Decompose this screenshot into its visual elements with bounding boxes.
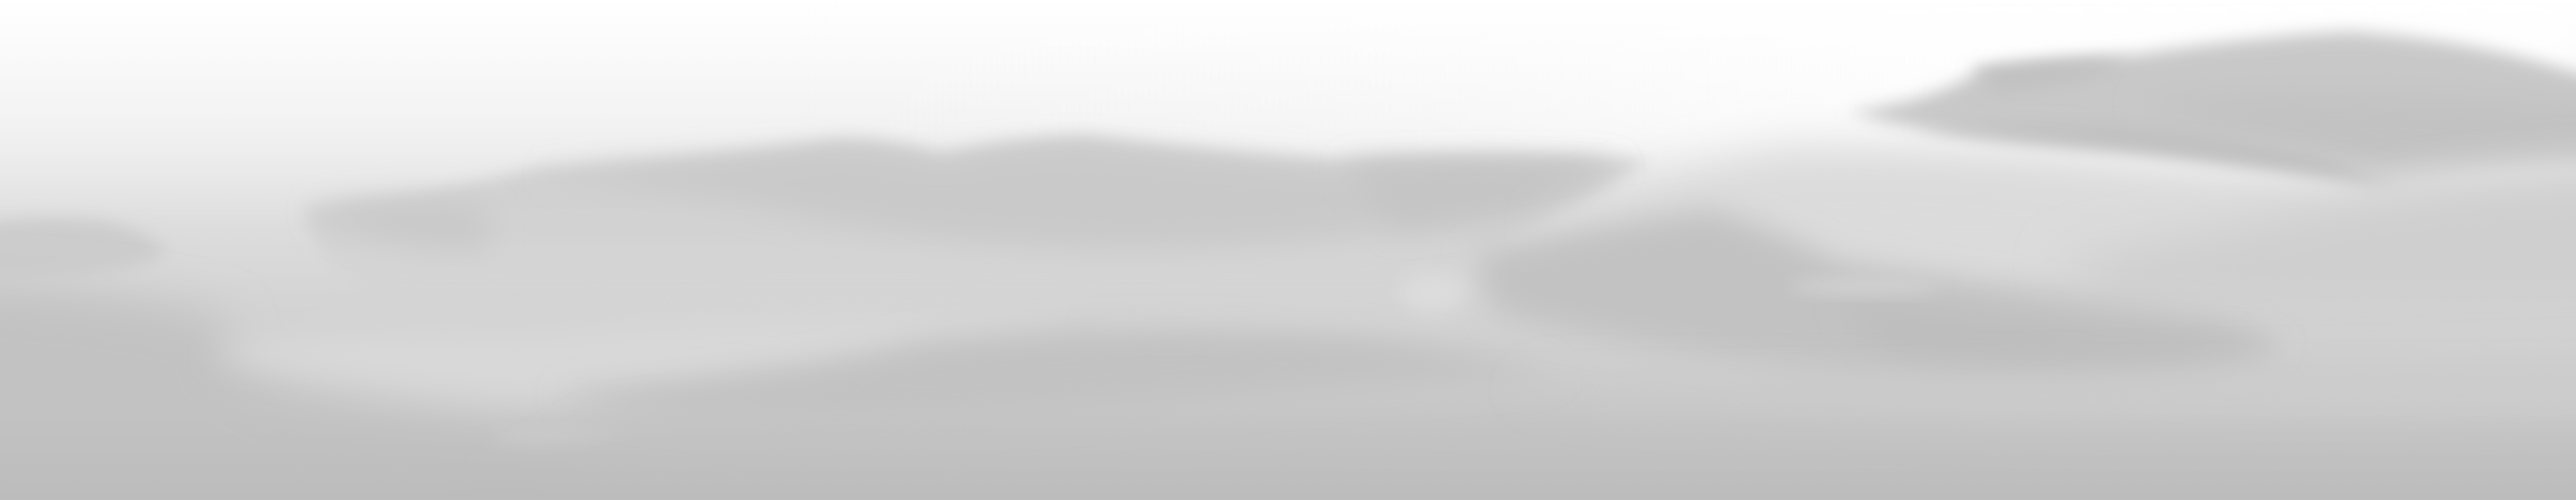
lower dark foreground hills xyxy=(0,330,2576,500)
far right mountain xyxy=(1848,32,2576,194)
left foothill xyxy=(0,218,526,500)
lower pale mist bands xyxy=(214,273,1939,446)
right mid-slope lit mist xyxy=(1544,148,2576,313)
central distant ridge xyxy=(304,137,1651,342)
dark mid-right hill xyxy=(1470,209,2284,380)
